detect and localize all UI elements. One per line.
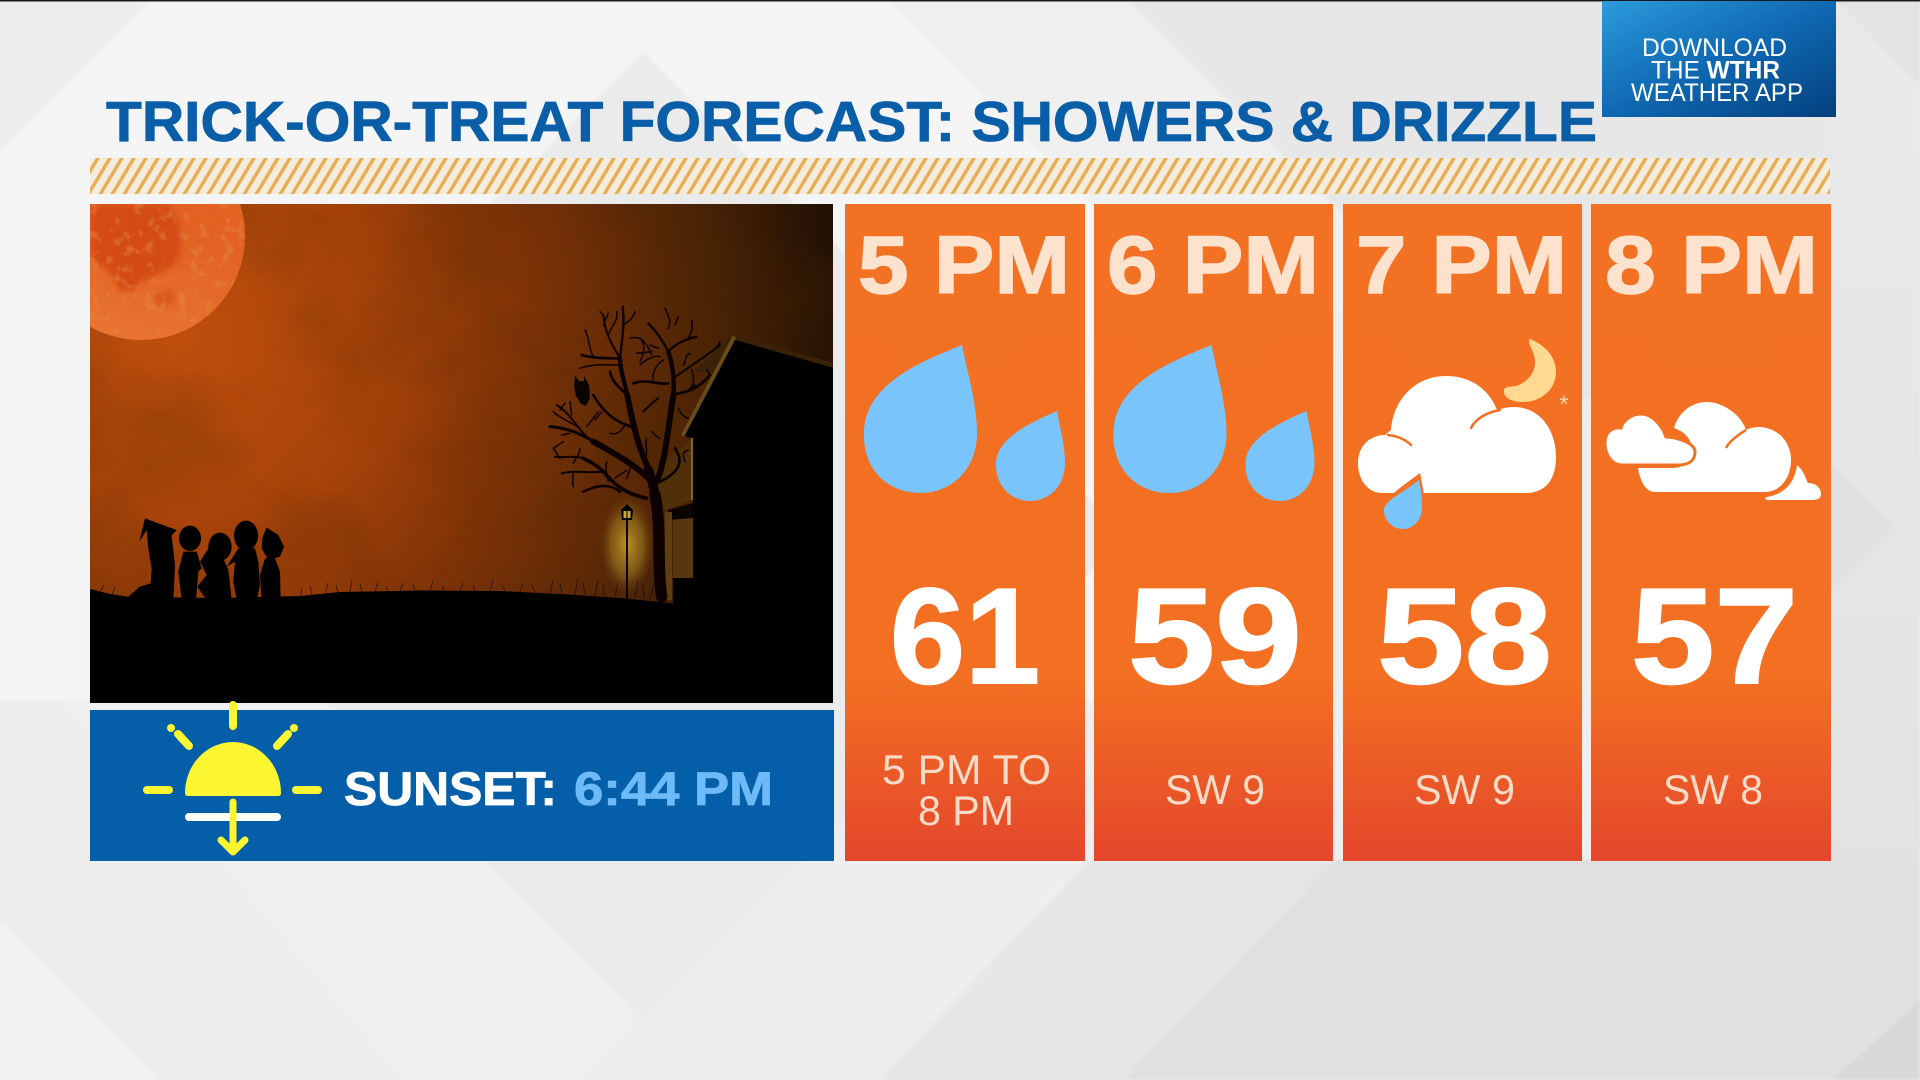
download app badge: [1602, 1, 1836, 117]
ground hill: [90, 589, 834, 703]
moon: [90, 204, 245, 340]
striped divider: [90, 158, 1830, 194]
temperature: 61: [890, 560, 1040, 712]
download app badge: DOWNLOAD: [1642, 34, 1787, 62]
panel: 8 PM forecast: [1591, 204, 1831, 861]
rain window: [882, 746, 1051, 834]
tree: [550, 307, 720, 597]
panel: 5 PM forecast: [845, 204, 1085, 861]
icon: rain drops: [864, 345, 1065, 501]
grass: [100, 578, 654, 599]
hour: 8 PM: [1605, 220, 1818, 311]
owl: [574, 376, 590, 406]
download app badge: THE WTHR: [1651, 56, 1780, 84]
icon: rain drops: [1113, 345, 1314, 501]
house: [655, 335, 834, 620]
lamp post: [604, 501, 651, 599]
icon: clouds: [1605, 402, 1821, 500]
witch: [128, 518, 177, 600]
asterisk: *: [1559, 391, 1569, 419]
icon: cloud moon drizzle: [1358, 339, 1556, 532]
title: TRICK-OR-TREAT FORECAST: SHOWERS & DRIZZLE: [106, 90, 1597, 154]
panel: 6 PM forecast: [1094, 204, 1333, 861]
trick-or-treaters silhouettes: [128, 518, 284, 600]
rain window: 5 PM TO: [882, 746, 1051, 793]
wind: SW 8: [1663, 766, 1763, 813]
panel: sunset: [90, 705, 834, 861]
sunset label: SUNSET:: [344, 762, 557, 815]
icon: sunset: [147, 705, 318, 852]
wind: SW 9: [1414, 766, 1515, 813]
child four: [227, 521, 260, 600]
sky: [90, 204, 833, 604]
temperature: 57: [1631, 560, 1798, 712]
hour: 6 PM: [1107, 220, 1319, 311]
download app badge: WEATHER APP: [1631, 79, 1803, 107]
sunset time: 6:44 PM: [574, 762, 773, 815]
temperature: 59: [1128, 560, 1302, 712]
child two: [178, 526, 202, 600]
rain window: 8 PM: [918, 787, 1014, 834]
wind: SW 9: [1165, 766, 1265, 813]
child five: [260, 528, 284, 600]
hour: 5 PM: [858, 220, 1070, 311]
panel: 7 PM forecast: [1343, 204, 1582, 861]
hour: 7 PM: [1356, 220, 1567, 311]
temperature: 58: [1377, 560, 1552, 712]
child three: [197, 533, 232, 600]
panel: halloween night scene: [90, 204, 833, 703]
